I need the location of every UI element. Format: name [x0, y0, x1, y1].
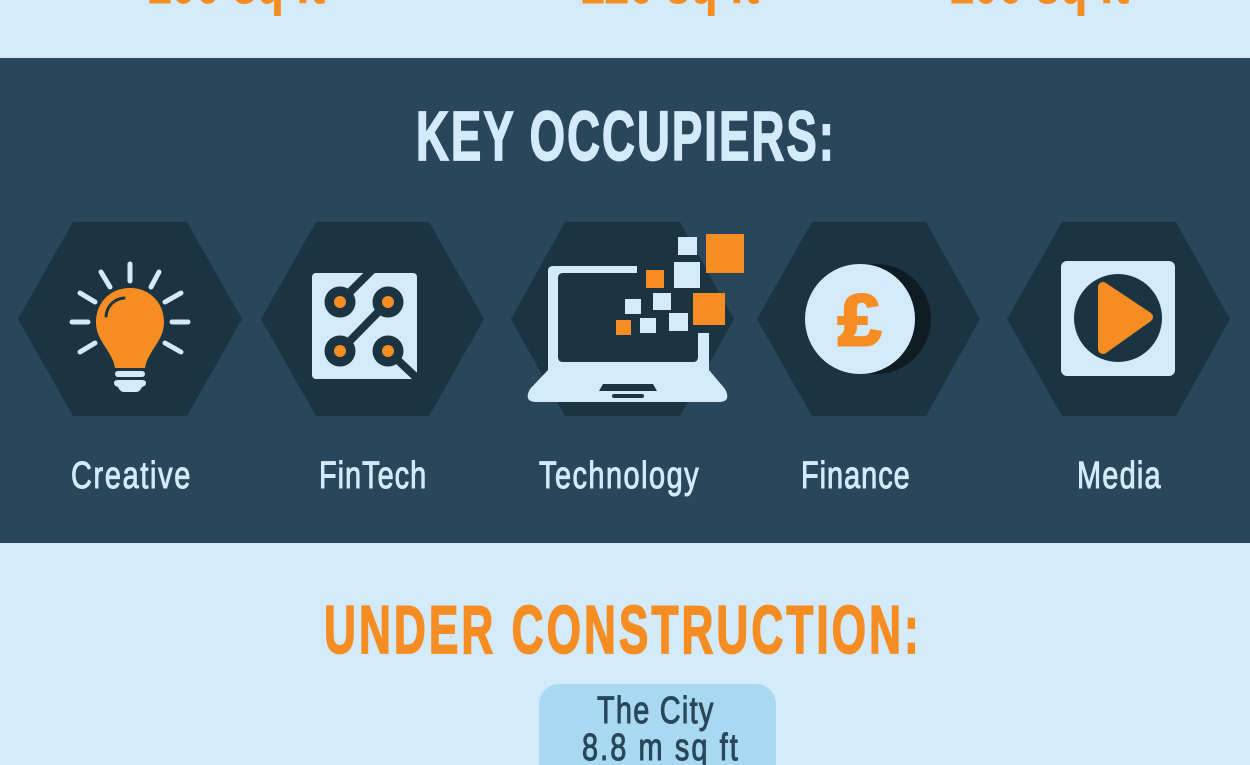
circuit nodes [324, 286, 404, 366]
occupier: media [1007, 222, 1230, 497]
laptop slot [612, 394, 644, 398]
bulb base [114, 371, 146, 392]
callout: the city [539, 684, 776, 765]
bulb glass [96, 288, 164, 368]
icon: play button [1061, 261, 1175, 376]
occupier: fintech [261, 222, 484, 497]
heading: key occupiers: KEY OCCUPIERS: [416, 97, 834, 175]
callout line 1: The City [597, 689, 713, 732]
coin face [805, 264, 915, 374]
label: creative: Creative [71, 454, 190, 497]
media square [1061, 261, 1175, 376]
pound sign: £ [838, 281, 881, 361]
coin shadow [821, 264, 931, 374]
orange pixels [616, 234, 744, 335]
occupier: technology [511, 222, 744, 497]
label: finance: Finance [801, 454, 910, 497]
bulb rays [72, 264, 188, 352]
occupier: finance [757, 222, 980, 497]
figures row: cropped floor space values [147, 0, 1129, 16]
bulb highlight [106, 298, 124, 316]
panel: key occupiers [0, 58, 1250, 543]
callout background [539, 684, 776, 765]
icon: pound coin [805, 264, 931, 374]
circuit square [312, 273, 417, 379]
icon: light bulb [72, 264, 188, 392]
label: media: Media [1077, 454, 1161, 497]
occupier: creative [18, 222, 242, 497]
hexagon: creative [18, 222, 242, 416]
label: technology: Technology [539, 454, 699, 497]
hexagon: fintech [261, 222, 484, 416]
circuit node centres [334, 296, 394, 357]
heading: under construction: UNDER CONSTRUCTION: [324, 593, 919, 668]
play triangle [1103, 287, 1148, 349]
icon: laptop with pixels [528, 234, 744, 402]
hexagon: finance [757, 222, 980, 416]
hexagon: technology [511, 222, 734, 416]
icon: circuit board [312, 270, 420, 381]
play circle [1074, 274, 1162, 362]
hexagon: media [1007, 222, 1230, 416]
light pixels [625, 237, 700, 333]
label: fintech: FinTech [319, 454, 426, 497]
panel background [0, 58, 1250, 543]
circuit traces [340, 270, 420, 381]
laptop body [528, 266, 727, 402]
laptop trackpad [599, 384, 657, 391]
